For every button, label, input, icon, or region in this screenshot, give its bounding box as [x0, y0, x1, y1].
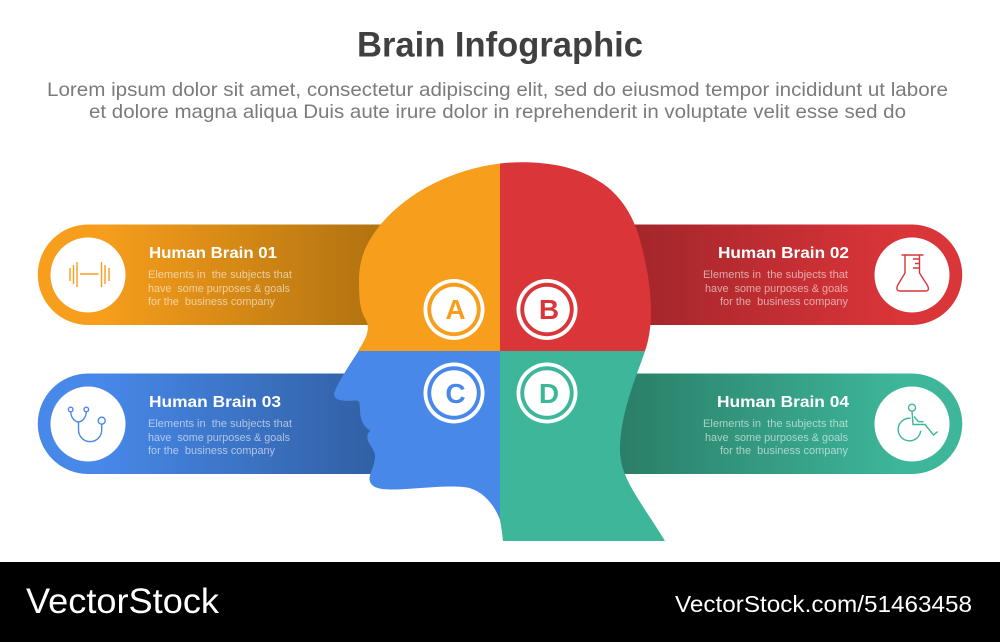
heading: Human Brain 04: Human Brain 04 [717, 394, 849, 411]
text block: description 03 [148, 418, 292, 457]
badge D [516, 362, 578, 424]
panel background: green band [500, 374, 962, 474]
panel: Human Brain 02 [500, 224, 962, 325]
head quadrant B: red [500, 162, 651, 351]
text block: description 04: Elements in the subjects that [703, 418, 848, 430]
footer image id: VectorStock.com/51463458 [675, 591, 972, 617]
subtitle text block: Lorem ipsum dolor sit amet, consectetur adipiscing elit, sed do eiusmod tempor incididunt ut labore [47, 79, 948, 101]
badge C: C [445, 378, 466, 409]
text block: description 03: have some purposes & goals [148, 432, 290, 444]
head quadrant A: orange [358, 164, 500, 351]
text block: description 04 [703, 418, 848, 457]
panel: Human Brain 01 [38, 224, 500, 325]
text block: description 04: for the business company [720, 445, 848, 457]
head quadrant D: green [500, 351, 665, 541]
subtitle text block [47, 79, 948, 123]
icon: wheelchair [874, 386, 950, 462]
heading: Human Brain 01: Human Brain 01 [149, 245, 277, 262]
heading: Human Brain 02: Human Brain 02 [718, 245, 849, 262]
head quadrant C: blue [334, 351, 500, 520]
head silhouette [334, 162, 665, 541]
badge D: D [539, 378, 559, 409]
text block: description 02 [703, 269, 848, 308]
text block: description 01 [148, 269, 292, 308]
icon: dumbbell [50, 238, 126, 312]
badge B: B [539, 294, 559, 325]
text block: description 02: have some purposes & goals [705, 283, 848, 295]
panel background: orange band [38, 224, 500, 325]
text block: description 02: Elements in the subjects that [703, 269, 848, 281]
text block: description 01: for the business company [148, 296, 275, 308]
panel: Human Brain 04 [500, 374, 962, 474]
text block: description 01: Elements in the subjects that [148, 269, 292, 281]
footer logo text: VectorStock [26, 582, 220, 621]
text block: description 04: have some purposes & goals [705, 432, 848, 444]
text block: description 01: have some purposes & goals [148, 283, 290, 295]
panel background: blue band [38, 374, 500, 474]
text block: description 03: Elements in the subjects that [148, 418, 292, 430]
heading: Human Brain 03: Human Brain 03 [149, 394, 281, 411]
text block: description 02: for the business company [720, 296, 848, 308]
subtitle text block: et dolore magna aliqua Duis aute irure dolor in reprehenderit in voluptate velit esse sed do [89, 101, 906, 123]
panel: Human Brain 03 [38, 374, 500, 474]
footer bar [0, 562, 1000, 642]
badge A: A [445, 294, 466, 325]
icon: stethoscope [50, 386, 126, 462]
title: Brain Infographic [357, 24, 643, 64]
panel background: red band [500, 224, 962, 325]
badge B [516, 279, 578, 340]
badge A [424, 279, 484, 340]
text block: description 03: for the business company [148, 445, 275, 457]
badge C [424, 362, 484, 424]
icon: flask [874, 238, 950, 312]
